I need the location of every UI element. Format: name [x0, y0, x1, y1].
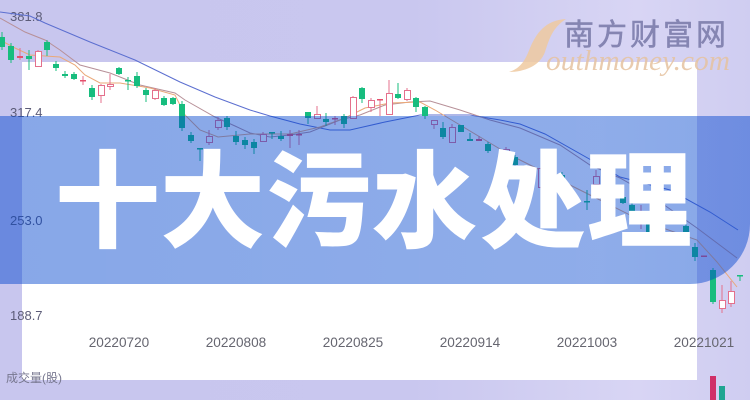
volume bars — [710, 376, 725, 400]
title: 十大污水处理 — [55, 118, 692, 270]
green volume bar — [719, 386, 725, 400]
logo latin name: outhmoney.com — [546, 45, 730, 77]
label 317.4: 317.4 — [10, 105, 43, 120]
blue title band — [0, 116, 750, 284]
x axis date labels — [89, 335, 734, 350]
rising candles: doji bars — [17, 56, 707, 257]
moving average lines — [0, 12, 738, 287]
label 188.7: 188.7 — [10, 308, 43, 323]
date 20220825: 20220825 — [323, 335, 383, 350]
date 20220720: 20220720 — [89, 335, 150, 350]
date 20220808: 20220808 — [206, 335, 266, 350]
falling candles: filled bodies — [0, 37, 743, 302]
volume axis label: 成交量(股) — [6, 370, 62, 385]
red volume bar — [710, 376, 716, 400]
long moving average — [0, 12, 738, 230]
label 253.0: 253.0 — [10, 213, 43, 228]
rising candles: hollow bodies — [36, 52, 734, 308]
short moving average — [0, 40, 737, 287]
label 381.8: 381.8 — [10, 9, 43, 24]
logo swoosh — [509, 19, 566, 72]
date 20220914: 20220914 — [440, 335, 501, 350]
middle moving average — [0, 18, 737, 258]
rising candles: wicks — [20, 48, 731, 313]
falling candles: wicks — [2, 32, 740, 304]
y axis labels — [10, 9, 43, 323]
date 20221003: 20221003 — [557, 335, 617, 350]
logo chinese name: 南方财富网 — [564, 19, 729, 52]
date 20221021: 20221021 — [674, 335, 734, 350]
white chart panel — [22, 62, 697, 380]
candlestick chart — [0, 32, 743, 313]
watermark: southmoney logo — [509, 19, 730, 77]
